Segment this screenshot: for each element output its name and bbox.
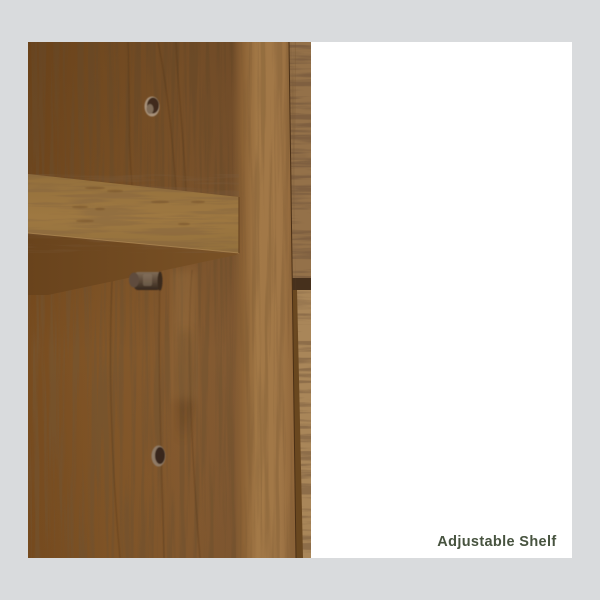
shelf underside: [28, 233, 239, 295]
lower peg hole: [152, 446, 166, 466]
shelf peg: [129, 272, 162, 290]
back panel: [28, 42, 253, 558]
caption: Adjustable Shelf: Adjustable Shelf: [437, 534, 556, 550]
upper peg hole: [144, 96, 160, 116]
shelf front face: [28, 174, 239, 253]
photo: wooden cabinet interior with adjustable shelf: [28, 42, 572, 558]
white card: [28, 42, 572, 558]
lighter band: [174, 272, 194, 399]
right door upper: [288, 42, 311, 278]
vertical upright: [232, 42, 296, 558]
right door lower: [292, 290, 311, 558]
gap between doors: [292, 278, 311, 290]
darker grain patch: [176, 334, 193, 426]
